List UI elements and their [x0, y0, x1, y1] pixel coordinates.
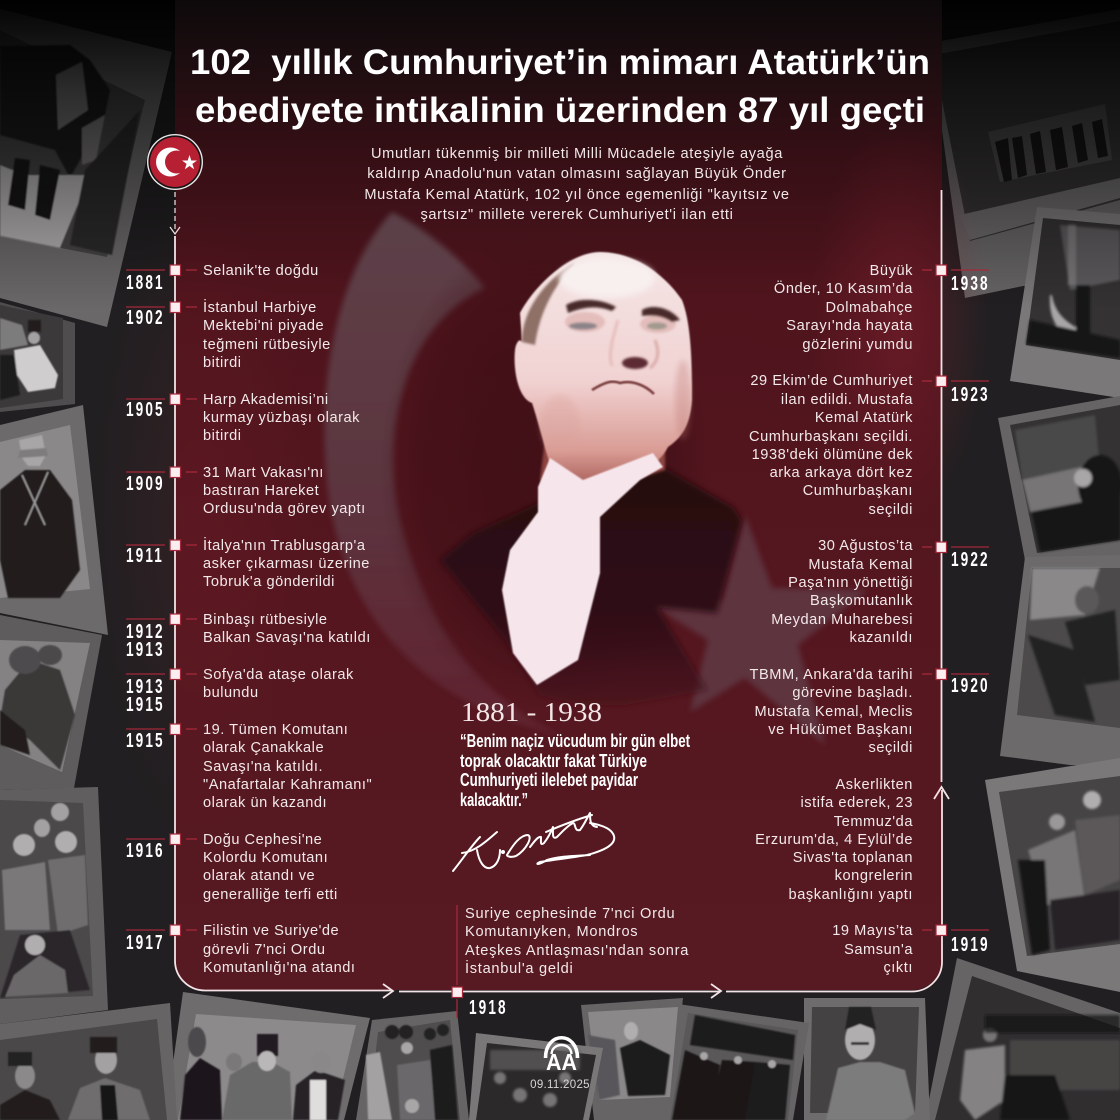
- photo: officer with rifle belt: [581, 998, 683, 1120]
- photo: Atatürk in kalpak: [0, 1003, 177, 1120]
- right timeline events: Büyük: [870, 263, 913, 279]
- right timeline years: 1919: [951, 933, 990, 956]
- flag star: [650, 515, 868, 745]
- quote: [460, 731, 690, 810]
- timeline line: [170, 190, 949, 998]
- photo: officers standing together: [356, 1011, 469, 1120]
- left timeline events: İstanbul Harbiye: [203, 298, 317, 316]
- left timeline events: Ordusu'nda görev yaptı: [203, 501, 366, 517]
- left timeline events: Doğu Cephesi'ne: [203, 832, 322, 848]
- left timeline years: 1915: [126, 693, 165, 716]
- photo: military portrait, Mustafa Kemal: [804, 998, 930, 1120]
- intro paragraph: Mustafa Kemal Atatürk, 102 yıl önce egemenliği "kayıtsız ve: [364, 187, 790, 203]
- mouth: [592, 382, 654, 394]
- timeline markers: [170, 265, 946, 998]
- right timeline events: Önder, 10 Kasım’da: [774, 279, 913, 297]
- right timeline events: Sivas'ta toplanan: [793, 850, 913, 866]
- quote: toprak olacaktır fakat Türkiye: [460, 751, 647, 771]
- right timeline events: Cumhurbaşkanı seçildi.: [749, 429, 913, 445]
- right timeline events: seçildi: [869, 740, 913, 756]
- left timeline events: Selanik'te doğdu: [203, 263, 319, 279]
- photo: Atatürk with robed men: [165, 992, 370, 1120]
- right timeline events: 29 Ekim’de Cumhuriyet: [750, 373, 913, 389]
- white collar and shirt: [502, 453, 663, 685]
- bottom centre event 1918 text: Ateşkes Antlaşması'ndan sonra: [465, 943, 689, 959]
- left timeline events: kurmay yüzbaşı olarak: [203, 410, 360, 426]
- left timeline events: Balkan Savaşı'na katıldı: [203, 630, 371, 646]
- right timeline events: TBMM, Ankara'da tarihi: [749, 667, 913, 683]
- forehead highlight: [559, 258, 655, 298]
- right timeline years: 1920: [951, 674, 990, 697]
- photo: crowd seated: [469, 1033, 603, 1120]
- right timeline events: kongrelerin: [835, 868, 913, 884]
- right timeline years: 1922: [951, 548, 990, 571]
- right timeline events: Askerlikten: [835, 777, 913, 793]
- left timeline events: Komutanlığı'na atandı: [203, 960, 355, 976]
- icon: Turkish flag medallion: [147, 134, 203, 190]
- left timeline events: Savaşı'na katıldı.: [203, 759, 323, 775]
- intro paragraph: şartsız" millete vererek Cumhuriyet'i ilan etti: [420, 207, 734, 223]
- left timeline events: Binbaşı rütbesiyle: [203, 612, 328, 628]
- hair: [522, 263, 575, 345]
- flag: crescent and star: [90, 120, 990, 840]
- cheek shading: [540, 395, 580, 455]
- left timeline events: [203, 263, 372, 976]
- arrow bottom 2: [711, 984, 721, 998]
- portrait of Atatürk: [440, 252, 742, 705]
- right timeline events: Kemal Atatürk: [815, 410, 913, 426]
- left timeline events: bitirdi: [203, 428, 242, 444]
- left timeline events: olarak Çanakkale: [203, 740, 324, 756]
- left timeline years: 1911: [126, 544, 164, 567]
- photo: two soldiers: [0, 302, 75, 412]
- right timeline events: Meydan Muharebesi: [771, 612, 913, 628]
- title: [190, 43, 930, 130]
- left timeline events: Mektebi'ni piyade: [203, 318, 324, 334]
- suit: [440, 467, 742, 705]
- dark halo behind portrait: [380, 230, 710, 710]
- photo: officers with pith helmets: [0, 787, 108, 1024]
- left timeline events: 31 Mart Vakası'nı: [203, 465, 324, 481]
- red central panel: [175, 0, 942, 990]
- bottom centre event 1918 text: Suriye cephesinde 7'nci Ordu: [465, 906, 675, 922]
- arrow up: [934, 787, 949, 799]
- left timeline years: 1902: [126, 306, 165, 329]
- right timeline events: Sarayı'nda hayata: [786, 318, 913, 334]
- right timeline events: [749, 263, 913, 976]
- left timeline years: 1913: [126, 638, 165, 661]
- left timeline years: 1912: [126, 620, 165, 643]
- photo: speech at the stand: [1000, 555, 1120, 765]
- right timeline events: Paşa'nın yönettiği: [788, 575, 913, 591]
- right timeline years: 1923: [951, 383, 990, 406]
- right timeline events: 30 Ağustos’ta: [818, 538, 913, 554]
- left timeline events: Tobruk'a gönderildi: [203, 574, 335, 590]
- right timeline events: gözlerini yumdu: [802, 337, 913, 353]
- right timeline years: [951, 272, 990, 956]
- right timeline events: Dolmabahçe: [825, 300, 913, 316]
- photo: officer with belts: [0, 405, 108, 635]
- left timeline events: bulundu: [203, 685, 259, 701]
- left timeline events: olarak ün kazandı: [203, 795, 327, 811]
- left timeline events: İtalya'nın Trablusgarp'a: [203, 536, 366, 554]
- left timeline events: görevli 7'nci Ordu: [203, 942, 325, 958]
- logo: Anadolu Agency: [546, 1038, 578, 1075]
- quote: Cumhuriyeti ilelebet payidar: [460, 770, 638, 790]
- photo: Anıtkabir: [930, 9, 1120, 298]
- left timeline years: 1917: [126, 931, 165, 954]
- left timeline years: 1881: [126, 271, 165, 294]
- intro paragraph: Umutları tükenmiş bir milleti Milli Mücadele ateşiyle ayağa: [371, 146, 783, 162]
- left timeline events: teğmeni rütbesiyle: [203, 337, 331, 353]
- neck: [540, 420, 665, 495]
- logo: Anadolu Agency: AA: [546, 1049, 577, 1075]
- bottom centre event 1918 text: Komutanıyken, Mondros: [465, 924, 638, 940]
- left timeline events: 19. Tümen Komutanı: [203, 722, 348, 738]
- left timeline events: Filistin ve Suriye'de: [203, 923, 339, 939]
- right timeline events: kazanıldı: [850, 630, 913, 646]
- right timeline years: 1938: [951, 272, 990, 295]
- title: 102 yıllık Cumhuriyet’in mimarı Atatürk’ün: [190, 43, 930, 82]
- photo: group in dark suits: [662, 1004, 809, 1120]
- years quote block: [460, 697, 690, 810]
- right timeline events: Samsun'a: [844, 942, 913, 958]
- right timeline events: Temmuz'da: [834, 814, 913, 830]
- right timeline events: arka arkaya dört kez: [770, 465, 913, 481]
- bottom centre event 1918 text: İstanbul'a geldi: [465, 959, 573, 977]
- right timeline events: ilan edildi. Mustafa: [781, 392, 913, 408]
- left timeline events: Sofya'da ataşe olarak: [203, 667, 354, 683]
- right timeline events: görevine başladı.: [792, 685, 913, 701]
- left timeline events: bitirdi: [203, 355, 242, 371]
- right timeline events: Başkomutanlık: [810, 593, 913, 609]
- right timeline events: başkanlığını yaptı: [789, 887, 913, 903]
- bottom centre event 1918 text: [465, 906, 689, 977]
- right timeline events: Cumhurbaşkanı: [803, 483, 913, 499]
- years of life: 1881 - 1938: [461, 697, 602, 727]
- date: 09.11.2025: [530, 1079, 590, 1091]
- right timeline events: Mustafa Kemal, Meclis: [754, 704, 913, 720]
- photo: birth house: [0, 9, 172, 327]
- year 1918: 1918: [469, 996, 508, 1019]
- left timeline events: "Anafartalar Kahramanı": [203, 777, 372, 793]
- intro paragraph: kaldırıp Anadolu'nun vatan olmasını sağlayan Büyük Önder: [367, 164, 787, 182]
- quote: kalacaktır.”: [460, 790, 528, 810]
- quote: “Benim naçiz vücudum bir gün elbet: [460, 731, 690, 751]
- flag crescent: [325, 212, 560, 735]
- right timeline events: seçildi: [869, 502, 913, 518]
- left timeline events: Kolordu Komutanı: [203, 850, 328, 866]
- left timeline events: generalliğe terfi etti: [203, 887, 338, 903]
- right timeline events: 1938'deki ölümüne dek: [752, 447, 913, 463]
- nose: [610, 320, 658, 369]
- right timeline events: istifa ederek, 23: [800, 795, 913, 811]
- left timeline events: Harp Akademisi’ni: [203, 392, 329, 408]
- left timeline events: bastıran Hareket: [203, 483, 319, 499]
- eyes and brows: [565, 300, 680, 333]
- left timeline years: 1909: [126, 472, 165, 495]
- connector red lines: [126, 270, 989, 1018]
- intro paragraph: [364, 146, 790, 223]
- left timeline events: olarak atandı ve: [203, 868, 315, 884]
- photo: Sivas congress group: [985, 758, 1120, 992]
- left timeline years: 1913: [126, 675, 165, 698]
- left timeline years: [126, 271, 165, 954]
- photo: Meclis crowd: [998, 396, 1120, 565]
- head: [515, 252, 692, 486]
- start dashed connector: [170, 192, 180, 234]
- left timeline years: 1905: [126, 398, 165, 421]
- title: ebediyete intikalinin üzerinden 87 yıl geçti: [195, 91, 925, 130]
- right timeline events: ve Hükümet Başkanı: [768, 722, 913, 738]
- right timeline events: Mustafa Kemal: [808, 557, 913, 573]
- right timeline events: Erzurum'da, 4 Eylül’de: [755, 832, 913, 848]
- photo: group of officers: [925, 958, 1120, 1120]
- left timeline events: asker çıkarması üzerine: [203, 556, 370, 572]
- right timeline events: çıktı: [883, 960, 913, 976]
- photo: officer in trench: [0, 615, 102, 790]
- left timeline years: 1916: [126, 839, 165, 862]
- right timeline events: 19 Mayıs’ta: [832, 923, 913, 939]
- top darkening: [0, 0, 1120, 310]
- signature: [453, 813, 614, 871]
- left timeline years: 1915: [126, 729, 165, 752]
- photo: Dolmabahçe: [1010, 207, 1120, 398]
- arrow bottom 1: [383, 984, 393, 998]
